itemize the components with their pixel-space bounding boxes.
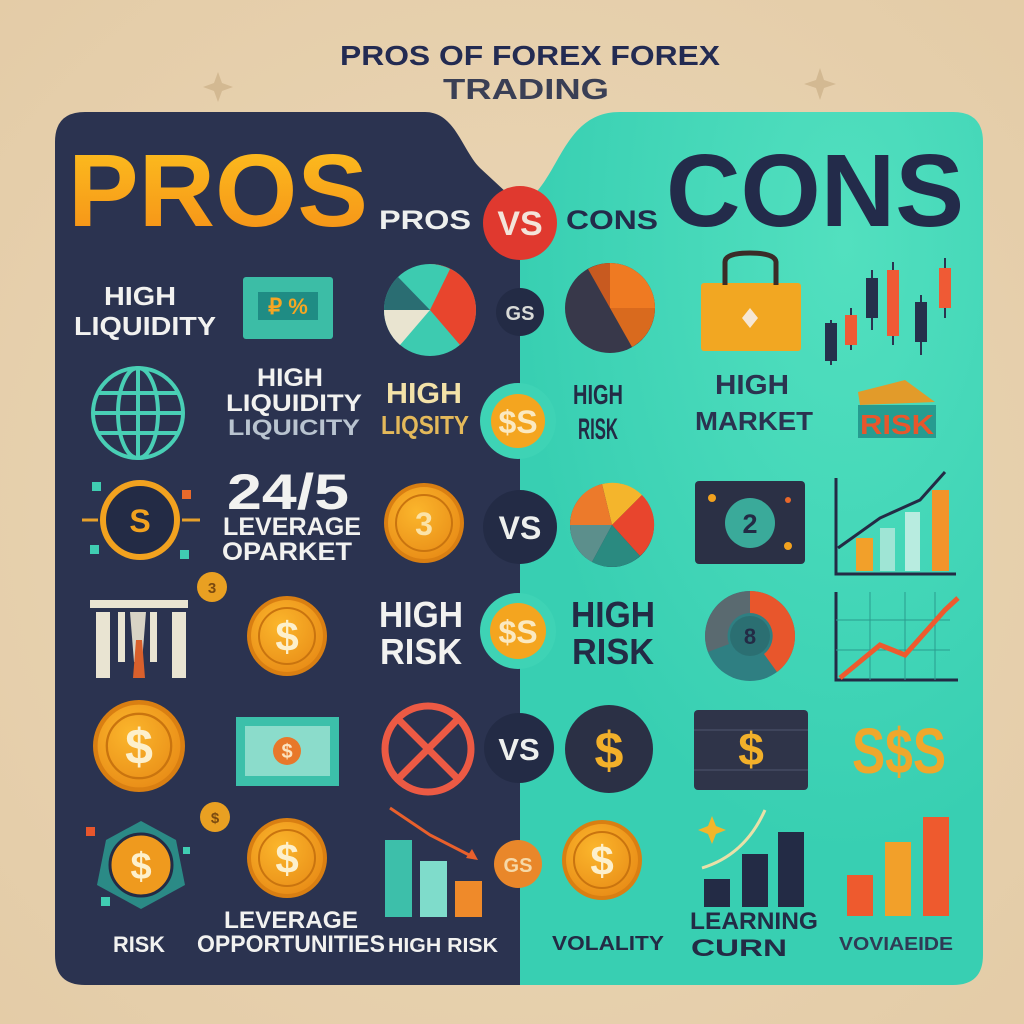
icon: dollar signs: S$S (852, 715, 946, 787)
text: leverage opportunities: LEVERAGE (224, 907, 358, 934)
text: high liquidity liquidity (226, 364, 362, 440)
text: high liquidity: LIQUIDITY (74, 311, 216, 341)
label: high risk: HIGH RISK (388, 935, 499, 957)
icon: dollar coin: $ (125, 719, 153, 775)
icon: center coin (480, 593, 556, 669)
text: 24/5 leverage (222, 464, 361, 566)
chart: candlesticks (825, 258, 951, 365)
text: learning curn: CURN (691, 935, 787, 962)
icon: small center coin (494, 840, 542, 888)
heading: PROS: PROS (68, 133, 368, 248)
icon: center coin (480, 383, 556, 459)
panel: cons (520, 112, 983, 985)
text: high risk cons: RISK (572, 631, 654, 672)
icon: coin 3 (384, 483, 464, 563)
text: high liquidity liquidity: LIQUICITY (228, 415, 360, 440)
icon: dark card: 2 (742, 509, 758, 539)
badge: vs (483, 490, 557, 564)
icon: coin with rays (82, 482, 200, 559)
icon: globe (93, 368, 183, 458)
icon: shopping bag (701, 253, 801, 351)
icon: small center coin: GS (504, 855, 532, 877)
label: risk: RISK (113, 932, 165, 957)
chart: bars with line (836, 472, 956, 574)
text: 24/5 leverage: LEVERAGE (223, 513, 361, 541)
chart: orange bars (847, 817, 949, 916)
icon: dollar coin (247, 818, 327, 898)
text: high market (695, 369, 813, 436)
text: 24/5 leverage: 24/5 (227, 464, 349, 520)
icon: risk coin (86, 821, 190, 909)
icon: dollar coin: $ (275, 835, 299, 882)
icon: center coin: $S (498, 404, 538, 440)
icon: dark dollar circle (565, 705, 653, 793)
icon: donut gauge: 8 (744, 624, 756, 649)
icon: small coin (200, 802, 230, 832)
icon: cross mark (385, 706, 471, 792)
icon: risk label: RISK (860, 409, 934, 440)
text: learning curn (690, 908, 818, 962)
icon: small coin: 3 (208, 580, 216, 597)
title: TRADING (443, 74, 609, 106)
label: volatility: VOLALITY (552, 933, 665, 955)
text: high liqsity: HIGH (386, 378, 462, 410)
icon: dark wallet: $ (738, 723, 764, 775)
chart: rising line (836, 592, 958, 680)
text: high liqsity: LIQSITY (381, 410, 469, 440)
text: 24/5 leverage: OPARKET (222, 538, 352, 566)
icon: sparkles (203, 68, 836, 102)
badge: vs (484, 713, 554, 783)
icon: center coin: $S (498, 614, 538, 650)
text: high market: MARKET (695, 406, 813, 436)
text: leverage opportunities (197, 907, 385, 958)
text: high risk (379, 594, 463, 672)
badge: small vs (496, 288, 544, 336)
icon: dollar coin (247, 596, 327, 676)
badge: VS top: VS (497, 205, 543, 243)
icon: donut gauge (705, 591, 795, 681)
text: high liquidity liquidity: LIQUIDITY (226, 390, 362, 417)
icon: dark wallet (694, 710, 808, 790)
chart: falling bars (385, 808, 482, 917)
icon: small coin: $ (211, 810, 220, 827)
title (340, 40, 720, 106)
icon: dollar coin: $ (275, 613, 299, 660)
icon: coin with rays: S (129, 503, 151, 539)
text: high liquidity (74, 281, 216, 341)
text: leverage opportunities: OPPORTUNITIES (197, 931, 385, 958)
badge: vs: VS (498, 732, 540, 767)
title: PROS OF FOREX FOREX (340, 40, 720, 71)
label: small cons: CONS (566, 205, 658, 235)
text: high risk (573, 379, 623, 446)
icon: dark card (695, 481, 805, 564)
text: high risk: HIGH (379, 594, 463, 635)
icon: dollar coin (93, 700, 185, 792)
label: voviaeide: VOVIAEIDE (839, 934, 953, 954)
text: high liquidity liquidity: HIGH (257, 364, 323, 392)
icon: colorful pie (570, 483, 654, 567)
icon: dark pie chart (565, 263, 655, 353)
icon: banknote: ₽ % (268, 294, 308, 319)
text: high risk: RISK (578, 413, 618, 446)
heading: CONS: CONS (666, 133, 964, 248)
icon: dark dollar circle: $ (595, 722, 624, 780)
badge: vs: VS (499, 510, 541, 546)
icon: cash note (236, 717, 339, 786)
icon: risk label (858, 380, 936, 440)
text: high risk cons: HIGH (571, 594, 655, 635)
text: high risk: HIGH (573, 379, 623, 410)
badge: VS top (483, 186, 557, 260)
text: high risk cons (571, 594, 655, 672)
icon: bank columns (90, 600, 188, 678)
badge: small vs: GS (506, 303, 534, 325)
icon: cash note: $ (281, 741, 293, 763)
icon: dollar coin (562, 820, 642, 900)
text: learning curn: LEARNING (690, 908, 818, 935)
icon: dollar coin: $ (590, 837, 614, 884)
text: high market: HIGH (715, 369, 789, 400)
icon: coin 3: 3 (415, 506, 433, 542)
icon: risk coin: $ (130, 846, 152, 888)
text: high liquidity: HIGH (104, 281, 176, 311)
icon: small coin (197, 572, 227, 602)
icon: banknote (243, 277, 333, 339)
panel: pros (55, 112, 520, 985)
icon: pie chart (384, 264, 476, 356)
label: small pros: PROS (379, 205, 471, 235)
text: high risk: RISK (380, 631, 462, 672)
chart: learning curve (698, 810, 804, 907)
text: high liqsity (381, 378, 469, 440)
